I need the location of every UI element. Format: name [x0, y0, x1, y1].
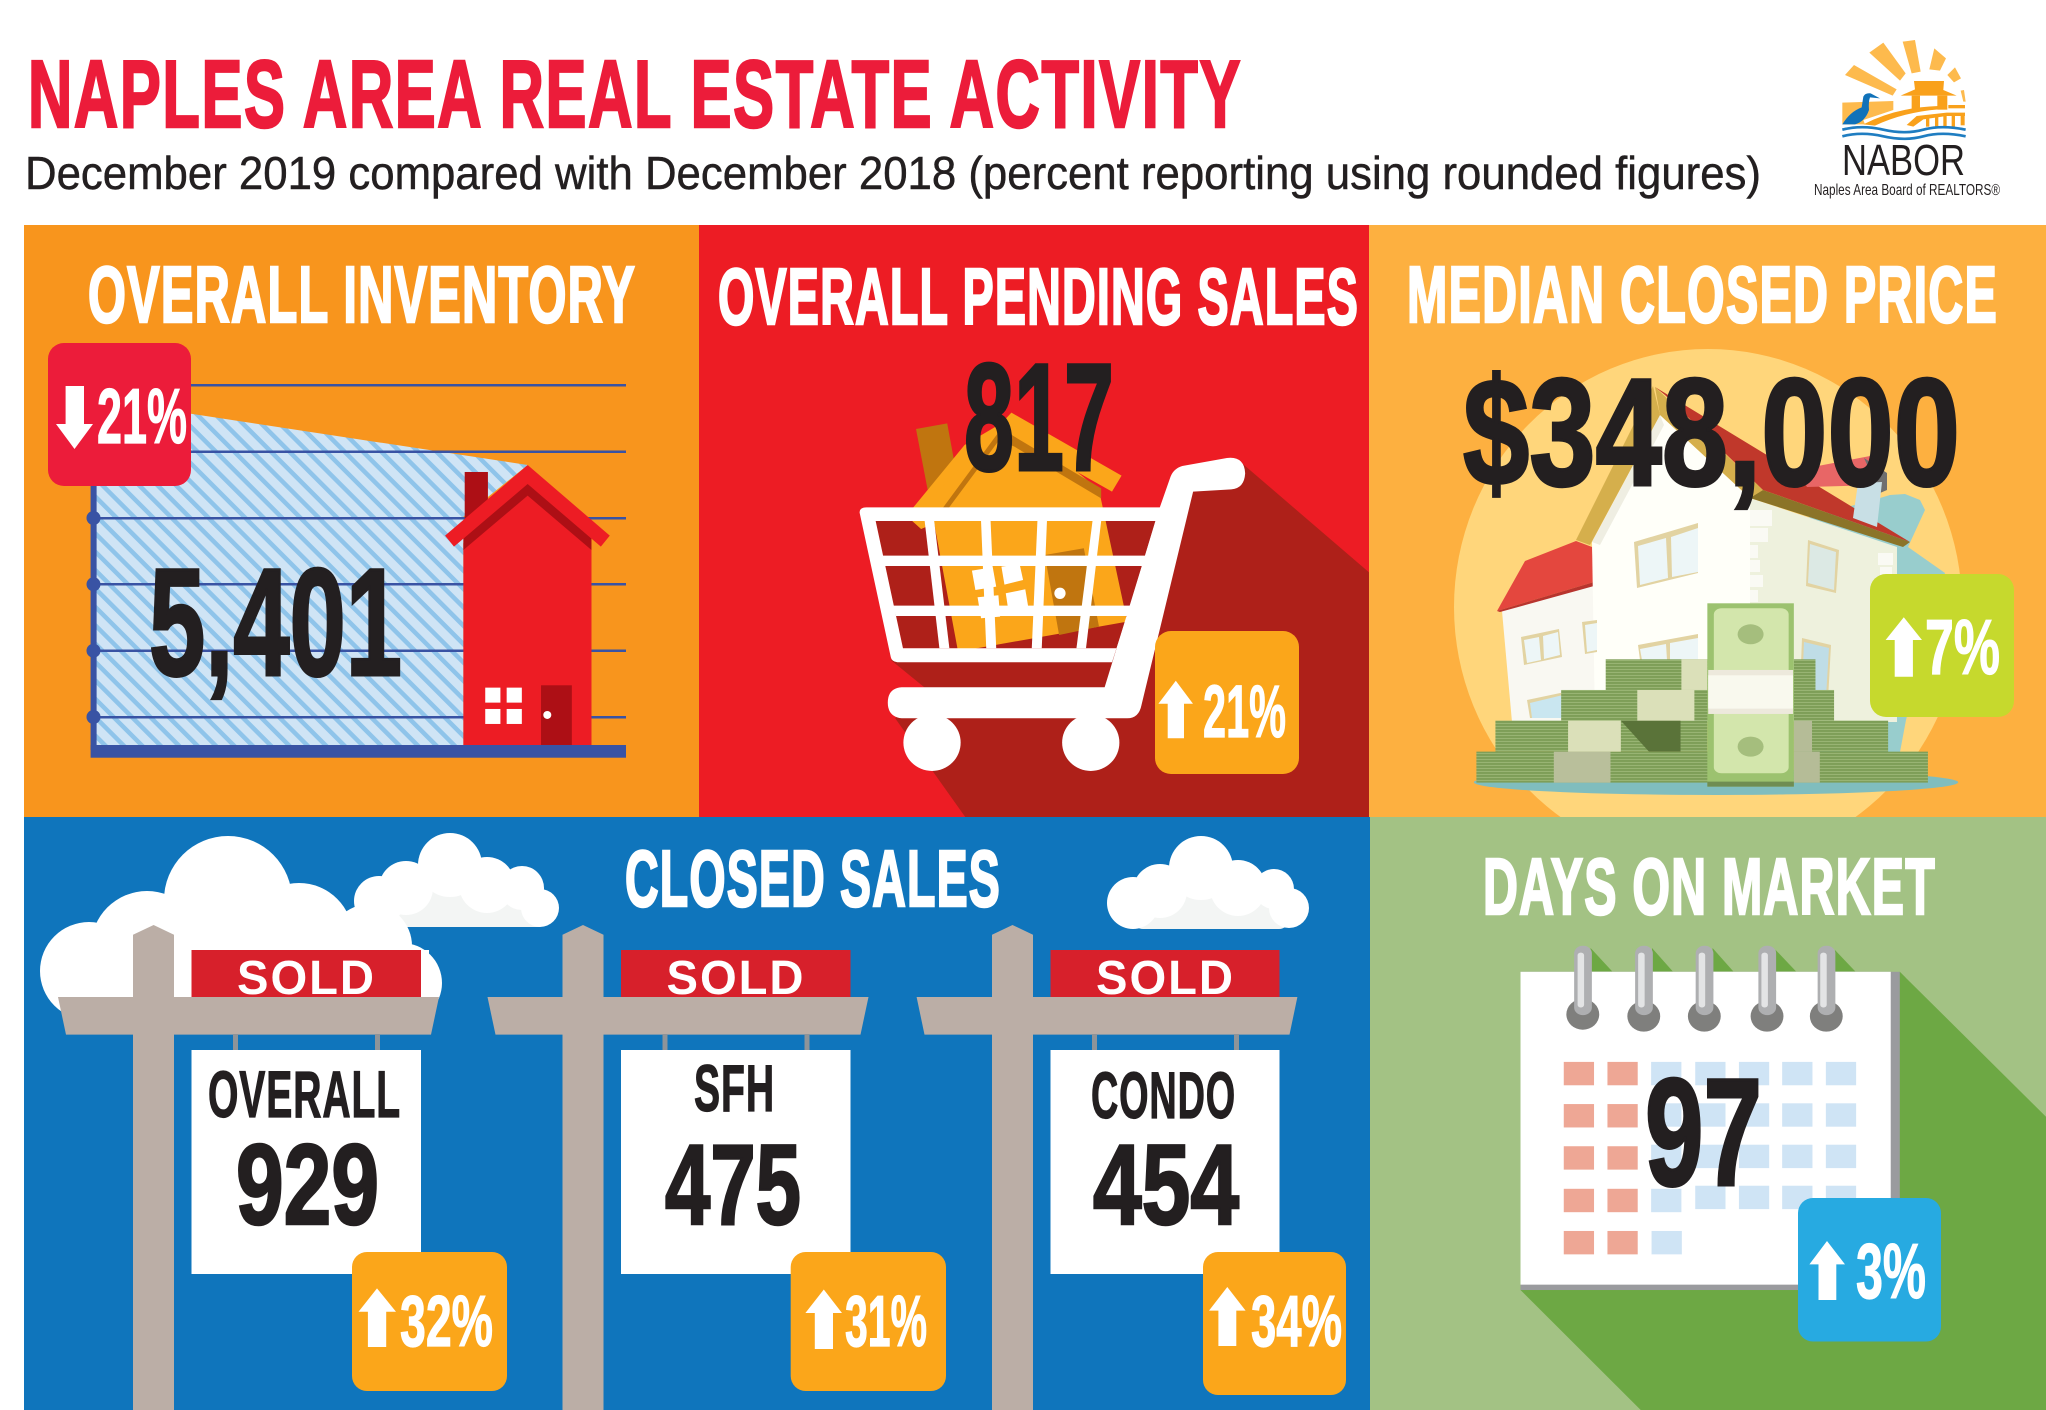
badge: up 31%	[791, 1252, 946, 1391]
label: overall: OVERALL	[208, 1057, 401, 1131]
label: SFH: SFH	[694, 1051, 775, 1125]
illustration: house and money	[1454, 349, 1962, 865]
sold banner: SOLD	[237, 952, 376, 1005]
logo wordmark: NABOR	[1842, 136, 1965, 185]
money stacks	[1474, 603, 1958, 795]
panel: overall inventory	[24, 225, 699, 818]
badge: up 7%	[1870, 574, 2014, 717]
sold banner	[1050, 950, 1280, 1005]
sign: SFH	[488, 925, 946, 1410]
label: condo: CONDO	[1091, 1058, 1236, 1132]
icon: small cloud	[354, 833, 559, 927]
badge value: 3%	[1856, 1227, 1926, 1315]
illustration: shopping cart with house	[860, 413, 1370, 817]
icon: up arrow	[1809, 1241, 1845, 1300]
icon: right cloud	[1107, 836, 1309, 929]
sun disc	[1454, 349, 1962, 865]
number: 97: 97	[1645, 1047, 1762, 1218]
icon: down arrow	[56, 386, 93, 449]
teal backdrop	[1800, 494, 1945, 752]
panel: overall pending sales	[699, 225, 1370, 818]
sign: condo	[917, 925, 1346, 1410]
number: 475: 475	[665, 1122, 801, 1249]
badge value: 7%	[1925, 603, 2000, 691]
icon: up arrow	[1209, 1287, 1246, 1346]
heading: overall inventory: OVERALL INVENTORY	[88, 250, 636, 339]
sold banner	[621, 950, 850, 1005]
logo: NABOR	[1814, 40, 2000, 199]
sign: overall	[58, 925, 507, 1410]
badge value: 31%	[845, 1282, 927, 1362]
icon: up arrow	[358, 1288, 396, 1347]
number: 929: 929	[236, 1122, 379, 1249]
badge value: 21%	[1203, 670, 1286, 753]
number: 454: 454	[1093, 1122, 1239, 1249]
heading: closed sales: CLOSED SALES	[625, 834, 1001, 923]
badge: up 32%	[352, 1252, 507, 1391]
badge: up 3%	[1798, 1198, 1941, 1342]
number: 817: 817	[964, 332, 1114, 503]
badge: up 21%	[1155, 631, 1299, 774]
illustration: calendar	[1521, 946, 2046, 1410]
badge value: 34%	[1251, 1282, 1342, 1362]
area chart	[86, 384, 626, 758]
badge: up 34%	[1203, 1252, 1346, 1395]
subtitle: December 2019 compared with December 2018 (percent reporting using rounded figures)	[25, 147, 1761, 199]
panel: closed sales	[24, 817, 1370, 1410]
icon: large cloud	[40, 836, 442, 1023]
icon: up arrow	[1886, 617, 1922, 677]
icon: up arrow	[1158, 681, 1193, 738]
icon: sun, pavilion, heron and waves	[1842, 40, 1966, 139]
title: NAPLES AREA REAL ESTATE ACTIVITY	[28, 41, 1242, 148]
heading: overall pending sales: OVERALL PENDING SALES	[718, 252, 1359, 341]
badge value: 32%	[400, 1282, 493, 1362]
sold banner: SOLD	[1096, 952, 1235, 1005]
badge value: 21%	[97, 372, 187, 460]
panel: median closed price	[1369, 225, 2046, 865]
icon: red house	[445, 465, 610, 745]
badge: down 21%	[48, 343, 191, 486]
sold banner	[192, 950, 421, 1005]
number: 5,401: 5,401	[149, 537, 402, 708]
sold banner: SOLD	[666, 952, 806, 1005]
icon: up arrow	[805, 1290, 842, 1349]
panel: days on market	[1370, 817, 2046, 1410]
house	[1497, 386, 1910, 722]
